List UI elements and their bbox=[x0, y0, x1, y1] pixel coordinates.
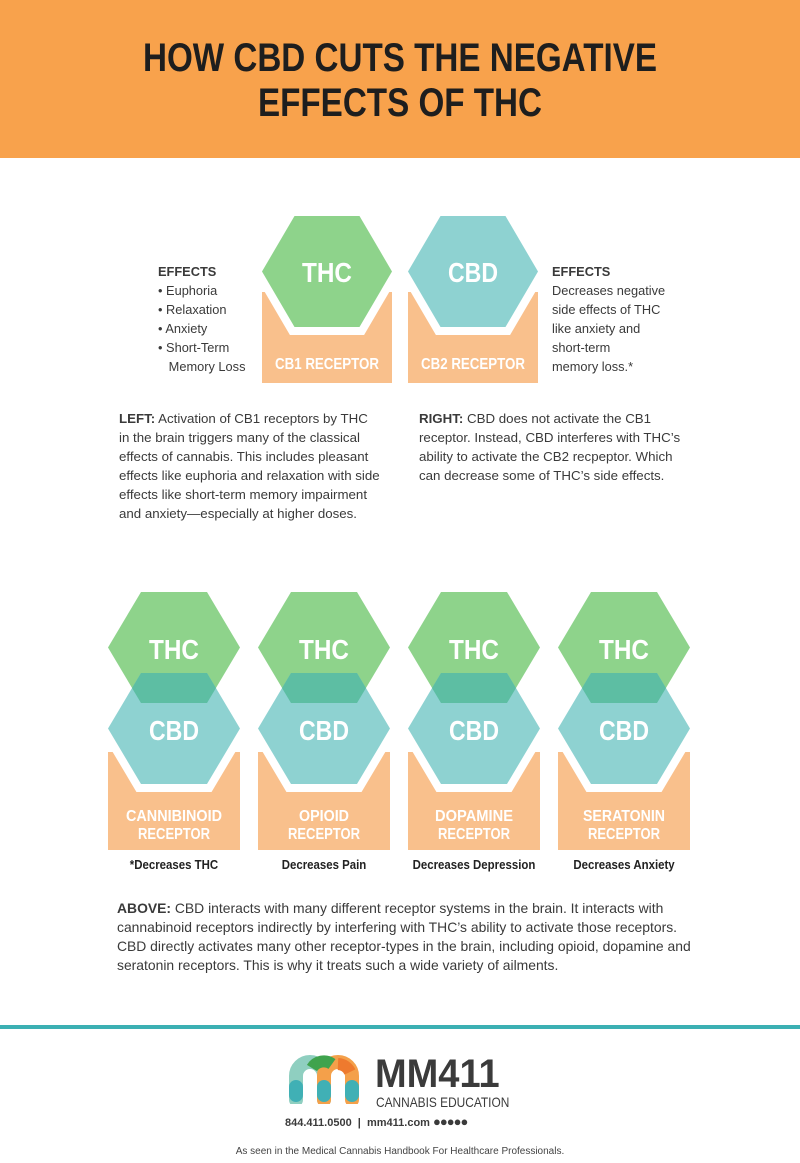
logo bbox=[285, 1052, 509, 1129]
column: cannabinoid receptor: CBD bbox=[149, 715, 199, 746]
THC effects list bbox=[158, 264, 246, 374]
column: seratonin receptor: THC bbox=[599, 634, 649, 665]
CB2 receptor block: CBD bbox=[448, 257, 498, 288]
column: opioid receptor bbox=[258, 592, 390, 850]
above explanation: ABOVE: CBD interacts with many different receptor systems in the brain. It interacts with bbox=[117, 900, 663, 916]
icon: m mark bbox=[289, 1055, 359, 1104]
right explanation: ability to activate the CB2 recpeptor. Which bbox=[419, 449, 673, 464]
title: HOW CBD CUTS THE NEGATIVE bbox=[143, 36, 657, 80]
right explanation bbox=[419, 411, 680, 483]
CBD effects text: EFFECTS bbox=[552, 264, 610, 279]
caption: decreases depression: Decreases Depression bbox=[413, 857, 535, 872]
CB2 receptor block: CB2 RECEPTOR bbox=[421, 356, 525, 373]
above explanation: seratonin receptors. This is why it treats such a wide variety of ailments. bbox=[117, 957, 558, 973]
column: dopamine receptor: THC bbox=[449, 634, 499, 665]
title: EFFECTS OF THC bbox=[258, 81, 542, 125]
title bbox=[143, 36, 657, 125]
column: opioid receptor: CBD bbox=[299, 715, 349, 746]
column: seratonin receptor bbox=[558, 592, 690, 850]
CBD effects text: memory loss.* bbox=[552, 359, 633, 374]
column: dopamine receptor: DOPAMINE bbox=[435, 808, 513, 825]
right explanation: can decrease some of THC’s side effects. bbox=[419, 468, 664, 483]
left explanation: in the brain triggers many of the classical bbox=[119, 430, 360, 445]
CB1 receptor block: THC bbox=[302, 257, 352, 288]
left explanation: effects like short-term memory impairment bbox=[119, 487, 367, 502]
column: seratonin receptor: SERATONIN bbox=[583, 808, 665, 825]
THC effects list: Memory Loss bbox=[169, 359, 245, 374]
column: seratonin receptor: CBD bbox=[599, 715, 649, 746]
right explanation: receptor. Instead, CBD interferes with THC’s bbox=[419, 430, 680, 445]
THC effects list: • Euphoria bbox=[158, 283, 217, 298]
above explanation: cannabinoid receptors indirectly by interfering with THC’s ability to activate those receptors. bbox=[117, 919, 677, 935]
THC effects list: • Relaxation bbox=[158, 302, 227, 317]
CBD effects text bbox=[552, 264, 665, 374]
caption: decreases THC: *Decreases THC bbox=[130, 857, 218, 872]
left explanation: effects like euphoria and relaxation with side bbox=[119, 468, 380, 483]
above explanation: CBD directly activates many other receptor-types in the brain, including opioid, dopamine and bbox=[117, 938, 691, 954]
header banner bbox=[0, 0, 800, 158]
teal divider bbox=[0, 1025, 800, 1029]
contact: 844.411.0500 | mm411.com ●●●●● bbox=[285, 1114, 467, 1129]
CBD effects text: side effects of THC bbox=[552, 302, 660, 317]
left explanation bbox=[119, 411, 380, 521]
left explanation: LEFT: Activation of CB1 receptors by THC bbox=[119, 411, 368, 426]
brand name: MM411 bbox=[375, 1052, 500, 1096]
column: opioid receptor: OPIOID bbox=[299, 808, 349, 825]
THC effects list: • Short-Term bbox=[158, 340, 229, 355]
column: seratonin receptor: RECEPTOR bbox=[588, 826, 660, 843]
column: cannabinoid receptor: THC bbox=[149, 634, 199, 665]
CBD effects text: like anxiety and bbox=[552, 321, 640, 336]
CBD effects text: short-term bbox=[552, 340, 610, 355]
CB2 receptor block bbox=[408, 216, 538, 383]
THC effects list: EFFECTS bbox=[158, 264, 216, 279]
THC effects list: • Anxiety bbox=[158, 321, 207, 336]
left explanation: and anxiety—especially at higher doses. bbox=[119, 506, 357, 521]
column: dopamine receptor bbox=[408, 592, 540, 850]
column: cannabinoid receptor: CANNIBINOID bbox=[126, 808, 222, 825]
footer note: As seen in the Medical Cannabis Handbook For Healthcare Professionals. bbox=[236, 1146, 564, 1157]
tagline: CANNABIS EDUCATION bbox=[376, 1094, 509, 1110]
column: opioid receptor: RECEPTOR bbox=[288, 826, 360, 843]
column: cannabinoid receptor bbox=[108, 592, 240, 850]
left explanation: effects of cannabis. This includes pleasant bbox=[119, 449, 368, 464]
column: cannabinoid receptor: RECEPTOR bbox=[138, 826, 210, 843]
CBD effects text: Decreases negative bbox=[552, 283, 665, 298]
CB1 receptor block: CB1 RECEPTOR bbox=[275, 356, 379, 373]
column: opioid receptor: THC bbox=[299, 634, 349, 665]
CB1 receptor block bbox=[262, 216, 392, 383]
diagram: receptors bbox=[108, 216, 690, 850]
column: dopamine receptor: CBD bbox=[449, 715, 499, 746]
right explanation: RIGHT: CBD does not activate the CB1 bbox=[419, 411, 651, 426]
above explanation bbox=[117, 900, 691, 973]
caption: decreases pain: Decreases Pain bbox=[282, 857, 366, 872]
column: dopamine receptor: RECEPTOR bbox=[438, 826, 510, 843]
caption: decreases anxiety: Decreases Anxiety bbox=[573, 857, 675, 872]
